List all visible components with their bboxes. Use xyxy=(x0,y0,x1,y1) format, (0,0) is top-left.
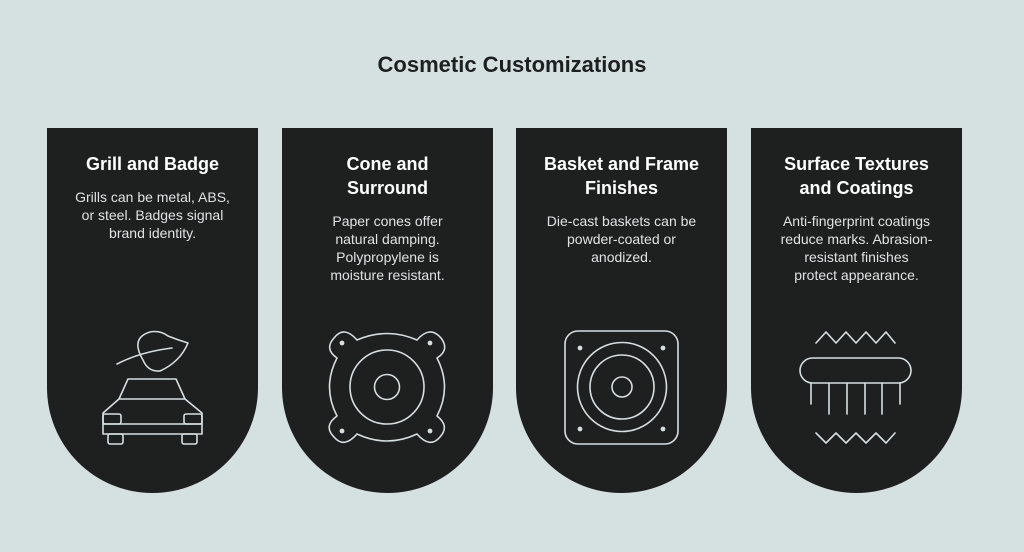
icon: square speaker xyxy=(565,331,678,444)
heading: Grill and Badge xyxy=(86,154,219,174)
text block xyxy=(781,213,932,283)
text block: Paper cones offer xyxy=(332,213,443,229)
panel: cone and surround xyxy=(282,128,493,493)
heading xyxy=(544,154,699,198)
heading xyxy=(346,154,428,198)
title: Cosmetic Customizations xyxy=(378,52,646,77)
text block: brand identity. xyxy=(109,225,196,241)
text block: anodized. xyxy=(591,249,652,265)
text block: natural damping. xyxy=(335,231,440,247)
heading xyxy=(784,154,929,198)
panel: surface textures xyxy=(751,128,962,493)
text block: Die-cast baskets can be xyxy=(547,213,696,229)
heading: Surface Textures xyxy=(784,154,929,174)
icon: coating brush xyxy=(800,332,911,443)
text block: resistant finishes xyxy=(804,249,909,265)
heading: and Coatings xyxy=(799,178,914,198)
heading: Finishes xyxy=(585,178,658,198)
text block: Grills can be metal, ABS, xyxy=(75,189,230,205)
heading: Cone and xyxy=(346,154,428,174)
text block xyxy=(75,189,230,241)
text block: protect appearance. xyxy=(794,267,919,283)
text block: or steel. Badges signal xyxy=(82,207,223,223)
text block: reduce marks. Abrasion- xyxy=(781,231,932,247)
text block: powder-coated or xyxy=(567,231,676,247)
text block: moisture resistant. xyxy=(330,267,445,283)
text block: Anti-fingerprint coatings xyxy=(783,213,930,229)
icon: round speaker xyxy=(329,332,445,442)
heading: Basket and Frame xyxy=(544,154,699,174)
heading: Surround xyxy=(347,178,428,198)
text block: Polypropylene is xyxy=(336,249,439,265)
icon: car with leaf xyxy=(103,332,202,444)
text block xyxy=(330,213,445,283)
panel: basket and frame xyxy=(516,128,727,493)
panel: grill and badge xyxy=(47,128,258,493)
text block xyxy=(547,213,696,265)
